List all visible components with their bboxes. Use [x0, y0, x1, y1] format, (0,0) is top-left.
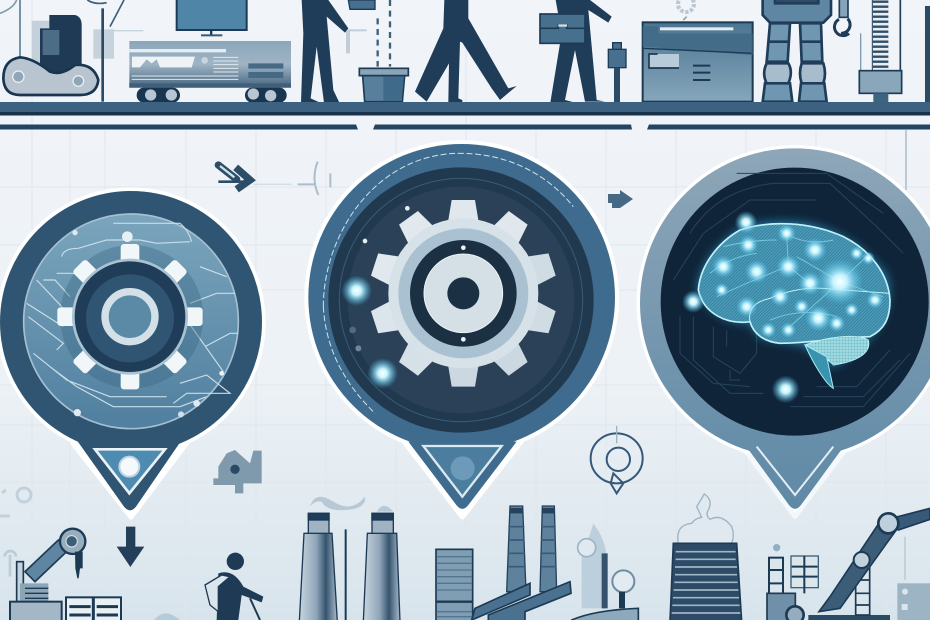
pin 1 body: [0, 191, 262, 510]
bucket, pour and pot: [348, 0, 408, 102]
squiggle sign: [298, 162, 330, 195]
pin 1 dial: [24, 214, 238, 429]
pin 3 halo: [738, 442, 852, 517]
pin 1 halo: [73, 443, 187, 517]
walking figure: [153, 553, 263, 620]
robot arm: [10, 529, 121, 620]
top band of machines and people: [0, 0, 930, 103]
small arrow icon: [218, 165, 292, 189]
pin 3: glowing brain: [637, 145, 930, 517]
spherical towers: [578, 523, 634, 608]
pin 2 glow dots: [341, 206, 410, 389]
pin 3 circuit traces: [673, 173, 910, 407]
pin 1 pointer triangle: [95, 449, 165, 493]
puzzle gear icon: [213, 450, 262, 493]
target icon: [591, 426, 643, 493]
pin 1 gear: [57, 231, 203, 389]
pin 2 halo: [404, 442, 521, 517]
pin 2 dark dial: [328, 167, 594, 433]
conveyor robot: [0, 0, 143, 102]
man with briefcase: [540, 0, 612, 103]
down arrow: [117, 527, 144, 567]
pin 2 body: [308, 144, 615, 509]
cabinet: [643, 0, 753, 102]
pin 1 circuit lines: [27, 223, 238, 407]
smoke: [310, 497, 393, 512]
slanted roofs: [472, 582, 638, 620]
brain: [698, 224, 890, 388]
pin 2 gear: [370, 200, 557, 387]
wrench: [834, 0, 850, 36]
shelf and divider lines: [0, 102, 930, 190]
pin 1: gear with circuit: [0, 187, 266, 517]
brain glow: [698, 223, 888, 367]
pin 2: large gear: [304, 140, 619, 517]
pin 2 pointer triangle: [423, 446, 502, 497]
monitor: [177, 0, 247, 36]
pin 2 soft dot: [451, 456, 475, 480]
bottom left factory scene: [5, 497, 473, 620]
right arrow icon: [608, 190, 633, 208]
pin 3 pointer chevron: [757, 447, 833, 495]
right buildings and arm: [767, 508, 930, 620]
twin chimneys: [299, 513, 400, 620]
walking man: [415, 0, 517, 102]
bottom right factory scene: [472, 494, 930, 620]
screw press: [859, 0, 930, 103]
wheeled machine: [129, 41, 291, 103]
robot legs: [763, 0, 831, 102]
post marker: [608, 43, 626, 102]
pin 1 light dot: [119, 457, 139, 477]
faint pipe: [5, 551, 16, 577]
neural nodes: [682, 211, 884, 403]
standing man: [301, 0, 367, 103]
faint gear left: [0, 488, 31, 516]
tall stacks: [507, 506, 557, 592]
pin 3 body: [640, 148, 930, 509]
pin 3 dark dial: [661, 168, 929, 436]
striped block: [436, 549, 473, 620]
cooling tower with steam: [670, 494, 742, 620]
pin 2 dashes: [323, 153, 573, 413]
